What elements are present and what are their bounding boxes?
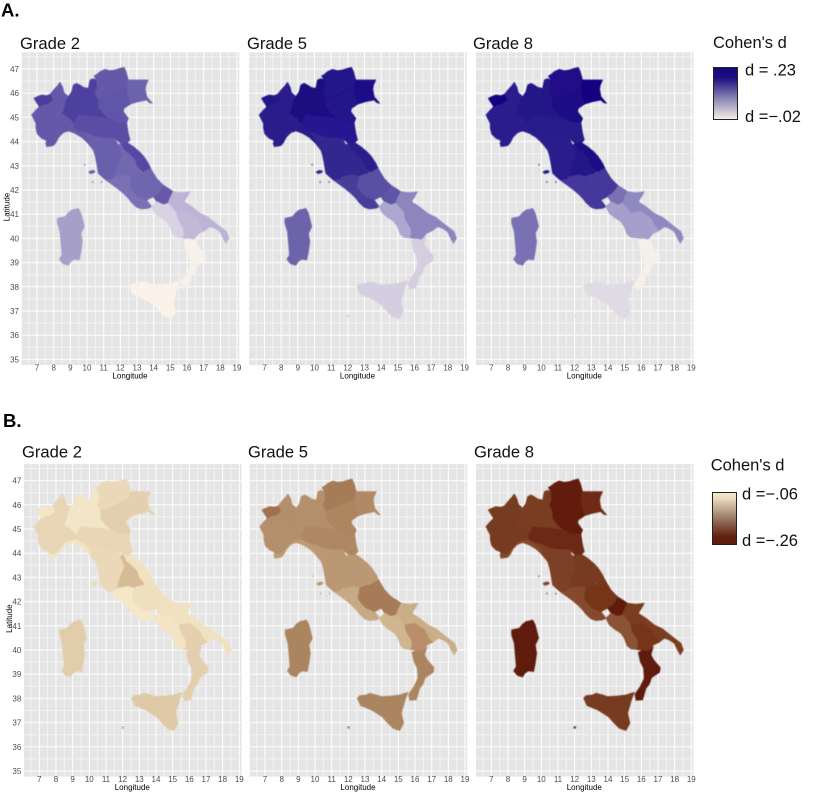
longitude tick labels: 14 [152, 775, 161, 784]
map: Italy regions [486, 67, 683, 319]
title: Grade 5: Grade 5 [248, 443, 308, 462]
axis title: Longitude: Longitude [115, 783, 150, 792]
longitude tick labels: 7 [263, 775, 268, 784]
legend bottom label: d =−.26 [742, 532, 798, 550]
legend top label: d =−.06 [742, 486, 798, 504]
title: Grade 2: Grade 2 [20, 34, 80, 53]
longitude tick labels: 7 [489, 364, 494, 372]
legend: panel A Cohen's d [713, 34, 801, 126]
longitude tick labels: 14 [377, 364, 386, 372]
latitude tick labels: 38 [10, 283, 20, 292]
longitude tick labels: 13 [135, 775, 144, 784]
longitude tick labels: 8 [279, 775, 284, 784]
latitude tick labels: 41 [10, 210, 20, 219]
longitude tick labels: 15 [394, 775, 403, 784]
title: Grade 2: Grade 2 [22, 443, 82, 462]
longitude tick labels: 18 [218, 775, 228, 784]
longitude tick labels: 10 [537, 364, 546, 372]
latitude tick labels: 35 [12, 767, 22, 776]
latitude tick labels: 44 [12, 549, 22, 558]
longitude tick labels: 17 [427, 775, 437, 784]
legend title: Cohen's d [713, 34, 787, 52]
longitude tick labels: 8 [54, 775, 59, 784]
longitude tick labels: 15 [166, 364, 175, 372]
longitude tick labels: 12 [570, 775, 580, 784]
legend title: Cohen's d [711, 456, 784, 474]
longitude tick labels: 15 [620, 364, 630, 372]
longitude tick labels: 12 [344, 775, 353, 784]
map: Italy regions [259, 67, 456, 319]
axis title: Longitude: Longitude [567, 783, 602, 792]
axis title: Latitude: Latitude [2, 192, 12, 221]
title: Grade 5: Grade 5 [247, 34, 307, 53]
latitude tick labels: 43 [10, 162, 20, 171]
longitude tick labels: 18 [670, 775, 680, 784]
longitude tick labels: 14 [377, 775, 387, 784]
longitude tick labels: 18 [444, 775, 453, 784]
panel: A Grade 5 map [247, 34, 469, 380]
longitude tick labels: 9 [68, 364, 73, 372]
legend colour bar [712, 492, 736, 544]
longitude tick labels: 12 [116, 364, 125, 372]
latitude tick labels: 41 [12, 622, 22, 631]
longitude tick labels: 13 [587, 775, 596, 784]
longitude tick labels: 19 [687, 364, 696, 372]
legend: panel B Cohen's d [711, 456, 798, 550]
longitude tick labels: 8 [51, 364, 56, 372]
longitude tick labels: 10 [537, 775, 546, 784]
latitude tick labels: 45 [12, 525, 22, 534]
latitude tick labels: 43 [12, 573, 22, 582]
longitude tick labels: 14 [604, 364, 613, 372]
latitude tick labels: 47 [10, 65, 20, 74]
longitude tick labels: 7 [262, 364, 267, 372]
longitude tick labels: 7 [37, 775, 42, 784]
longitude tick labels [35, 364, 242, 372]
axis title: Latitude: Latitude [5, 604, 14, 633]
latitude tick labels: 45 [10, 113, 20, 122]
longitude tick labels: 9 [296, 775, 301, 784]
panel: B Grade 2 map [5, 443, 244, 792]
latitude tick labels: 46 [12, 501, 22, 510]
longitude tick labels: 8 [279, 364, 284, 372]
longitude tick labels: 13 [133, 364, 142, 372]
axis title: Longitude: Longitude [112, 372, 148, 380]
longitude tick labels: 10 [311, 775, 320, 784]
longitude tick labels: 17 [199, 364, 209, 372]
longitude tick labels: 19 [233, 364, 242, 372]
longitude tick labels: 7 [35, 364, 40, 372]
heading: panel A: A. [1, 0, 20, 20]
legend bottom label: d =−.02 [745, 108, 801, 126]
panel: A Grade 8 map [473, 34, 696, 380]
latitude tick labels: 40 [12, 646, 22, 655]
longitude tick labels: 16 [185, 775, 194, 784]
plot background [250, 464, 467, 777]
longitude tick labels: 11 [327, 364, 336, 372]
longitude tick labels: 18 [216, 364, 225, 372]
map: Italy regions [486, 479, 683, 731]
longitude tick labels: 9 [70, 775, 75, 784]
longitude tick labels: 11 [102, 775, 111, 784]
longitude tick labels: 18 [443, 364, 453, 372]
longitude tick labels: 19 [235, 775, 244, 784]
latitude tick labels: 47 [12, 477, 22, 486]
longitude tick labels: 9 [522, 364, 527, 372]
longitude tick labels: 15 [393, 364, 403, 372]
longitude tick labels [489, 775, 696, 784]
latitude tick labels: 42 [10, 186, 20, 195]
longitude tick labels: 19 [687, 775, 696, 784]
latitude tick labels: 35 [10, 355, 20, 364]
longitude tick labels: 9 [296, 364, 301, 372]
longitude tick labels: 14 [149, 364, 159, 372]
plot background [476, 52, 694, 365]
longitude tick labels: 16 [410, 364, 419, 372]
latitude tick labels: 36 [10, 331, 20, 340]
longitude tick labels: 11 [554, 364, 563, 372]
latitude tick labels: 37 [10, 307, 20, 316]
longitude tick labels: 16 [183, 364, 192, 372]
longitude tick labels [489, 364, 696, 372]
panel: B Grade 5 map [248, 443, 470, 792]
panel: B Grade 8 map [474, 443, 696, 792]
longitude tick labels: 17 [654, 364, 663, 372]
axis title: Longitude: Longitude [340, 783, 376, 792]
plot background [476, 464, 694, 777]
latitude tick labels: 36 [12, 743, 22, 752]
longitude tick labels: 16 [637, 775, 646, 784]
plot background [24, 464, 242, 777]
longitude tick labels: 11 [328, 775, 336, 784]
longitude tick labels: 11 [554, 775, 563, 784]
longitude tick labels: 11 [100, 364, 108, 372]
legend colour bar [714, 68, 738, 120]
title: Grade 8: Grade 8 [474, 443, 534, 462]
latitude tick labels: 42 [12, 598, 22, 607]
longitude tick labels: 8 [506, 364, 511, 372]
latitude tick labels [10, 65, 20, 364]
longitude tick labels [262, 364, 469, 372]
latitude tick labels: 39 [10, 259, 20, 268]
longitude tick labels: 10 [85, 775, 94, 784]
plot background [249, 52, 467, 365]
heading: panel B: B. [3, 410, 22, 431]
longitude tick labels: 10 [310, 364, 319, 372]
longitude tick labels: 15 [168, 775, 178, 784]
longitude tick labels: 12 [570, 364, 580, 372]
longitude tick labels: 16 [637, 364, 646, 372]
axis title: Longitude: Longitude [340, 372, 376, 380]
longitude tick labels: 19 [460, 364, 469, 372]
latitude tick labels: 38 [12, 694, 22, 703]
longitude tick labels: 12 [118, 775, 128, 784]
title: Grade 8: Grade 8 [473, 34, 533, 53]
longitude tick labels: 16 [411, 775, 420, 784]
map: Italy regions [34, 479, 231, 731]
longitude tick labels: 19 [461, 775, 470, 784]
longitude tick labels: 13 [361, 775, 370, 784]
map: Italy regions [260, 479, 457, 731]
latitude tick labels: 46 [10, 89, 20, 98]
map: Italy regions [32, 67, 229, 319]
longitude tick labels [37, 775, 244, 784]
longitude tick labels: 13 [360, 364, 369, 372]
latitude tick labels: 40 [10, 234, 20, 243]
latitude tick labels: 37 [12, 719, 22, 728]
panel: A Grade 2 map [2, 34, 242, 380]
longitude tick labels: 12 [343, 364, 353, 372]
longitude tick labels: 17 [427, 364, 436, 372]
longitude tick labels: 7 [489, 775, 494, 784]
legend top label: d = .23 [745, 62, 796, 80]
longitude tick labels: 18 [670, 364, 680, 372]
longitude tick labels: 8 [506, 775, 511, 784]
longitude tick labels: 15 [620, 775, 630, 784]
latitude tick labels: 44 [10, 138, 20, 147]
plot background [22, 52, 239, 365]
longitude tick labels [263, 775, 470, 784]
longitude tick labels: 14 [604, 775, 613, 784]
longitude tick labels: 17 [202, 775, 211, 784]
latitude tick labels [12, 477, 22, 776]
longitude tick labels: 17 [654, 775, 663, 784]
axis title: Longitude: Longitude [567, 372, 602, 380]
latitude tick labels: 39 [12, 670, 22, 679]
longitude tick labels: 10 [83, 364, 92, 372]
longitude tick labels: 13 [587, 364, 596, 372]
longitude tick labels: 9 [522, 775, 527, 784]
